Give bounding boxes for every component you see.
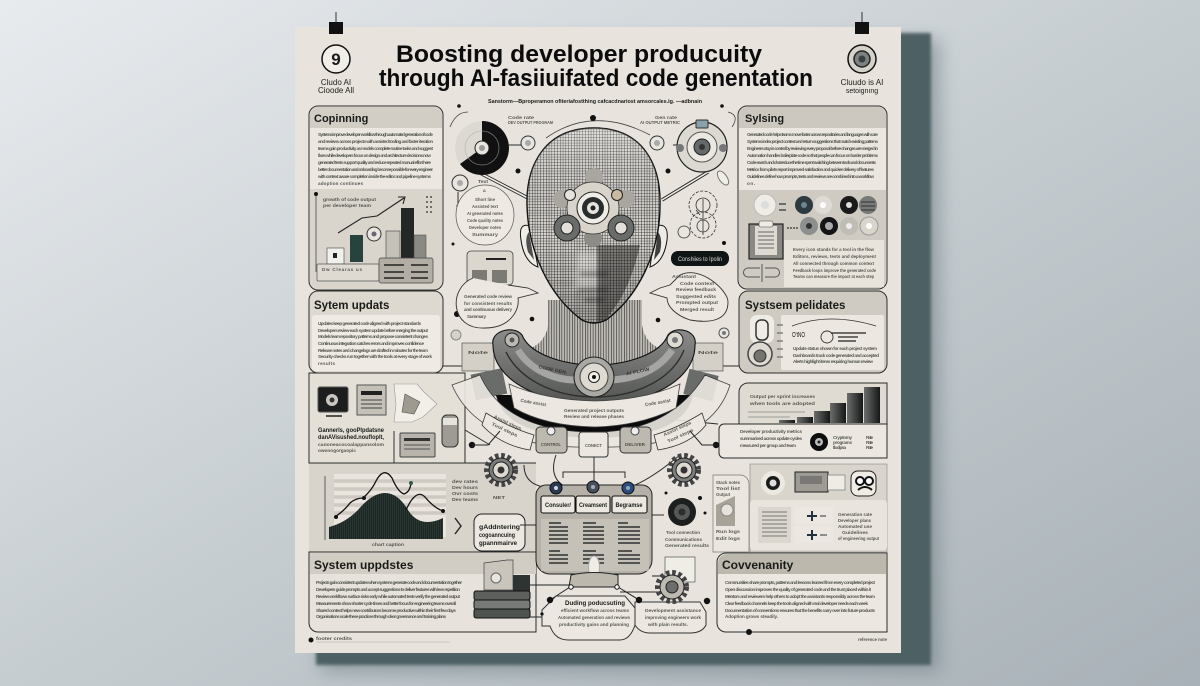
callout: bottom bubble two [635, 602, 706, 633]
side tabs right: Note [698, 350, 719, 355]
panel: metrics strip: measured per group and team [740, 443, 796, 448]
tab: Connect: CONECT [585, 443, 602, 448]
icon: small screen card [400, 433, 435, 457]
icon: window card [467, 251, 513, 285]
text block: Measurements show shorter cycle times and better focus for engineering teams overall [316, 601, 456, 606]
text block [784, 240, 884, 287]
icon: link [744, 264, 780, 282]
panel: Sylsing [738, 106, 887, 289]
text block [838, 512, 879, 541]
collar: AI FLOW [625, 366, 651, 376]
column headers: Begramse [616, 503, 643, 509]
text block: Every icon stands for a tool in the flow [793, 247, 874, 252]
text block [725, 580, 875, 619]
icon: camera node [676, 120, 727, 172]
callout: right speech bubble: Prompted output [676, 300, 719, 305]
panel: bar chart [739, 383, 887, 431]
collar [493, 330, 695, 404]
callout: left bubble: Assisted text [472, 204, 498, 209]
icon: disc [810, 433, 828, 451]
subtitle: Sanstorm—Bproperamon ofiteriafostthing cafcacdnariost amsorcales.ig. —adbnain [488, 99, 702, 105]
callout: right speech bubble: Review feedback [676, 287, 716, 292]
text block: Clear feedback channels keep the tools aligned with real developer needs each week [725, 601, 868, 606]
panel: metrics strip: Rate [866, 445, 873, 450]
black nodes left and right of ribbons [469, 431, 719, 448]
callout: cogoanncuing [479, 533, 515, 539]
text block: Alerts highlight items requiring human review [793, 359, 873, 364]
text block: Updates keep generated code aligned with project standards [318, 321, 421, 326]
beige banner: Generated project outputs [564, 408, 624, 413]
callout: gauge label: O'tNO [792, 332, 805, 339]
callout: left bubble: Text [478, 179, 489, 184]
side ribbon left: Tool steps [491, 421, 519, 438]
text block: Systems index project context and return suggestions that match existing patterns [747, 139, 878, 144]
side ribbon right [654, 413, 706, 450]
text block: Guidelines [842, 530, 868, 535]
icon: monitor [318, 387, 348, 416]
text block: teams gain productivity as models complete routine tasks and suggest [318, 146, 433, 151]
text block: of engineering output [838, 536, 879, 541]
text block: Update status shown for each project system [793, 346, 877, 351]
chart: mountain and line: chart caption [372, 542, 404, 547]
text block: Gannerls, gooPlpdatsne [318, 427, 384, 434]
icon: small node left [521, 136, 535, 150]
heading: Sytem updats [314, 300, 389, 312]
callout [474, 514, 525, 551]
text block [747, 132, 878, 186]
panel: System uppdstes [309, 552, 536, 632]
text block: Continuous integration catches errors and improves confidence [318, 341, 424, 346]
callout: bottom bubble one: efficient workflow across teams [561, 608, 629, 613]
icon: lower gear [658, 573, 686, 601]
text block: Security checks run together with the tools at every stage of work [318, 354, 432, 359]
text block: Editors, reviews, tests and deployment [793, 254, 876, 259]
beige banner: Review and release phases [564, 414, 624, 419]
callout: right speech bubble [650, 273, 728, 321]
icon: left node circle [452, 175, 468, 210]
icon: left hanging clip [329, 12, 343, 34]
ears [520, 225, 667, 267]
title: through AI-fasiiuifated code genentation [379, 65, 813, 92]
beige banner: Code assist [645, 398, 671, 407]
text block: top right labels: AI OUTPUT METRIC [640, 120, 681, 125]
text block: Dev hours [452, 485, 479, 490]
column headers: Consuler/ [545, 503, 571, 509]
panel: lower right mid column: Stack notes [716, 480, 740, 485]
column lines [549, 523, 640, 563]
icon: cylinder [442, 415, 458, 447]
callout: right speech bubble: Merged result [680, 307, 715, 312]
chart: donut dial [455, 121, 509, 175]
callout: bottom bubble two: improving engineers work [645, 615, 701, 620]
callout: left bubble: Summary [472, 232, 499, 237]
footer right: reference note [858, 637, 887, 642]
icon: person marker [569, 556, 618, 587]
icon: left gear [487, 456, 515, 484]
text block: Developers guide prompts and accept suggestions to deliver features with less repetition [316, 587, 460, 592]
text block: top right labels [640, 115, 681, 125]
text block: Projects gain consistent updates when systems generate code and documentation together [316, 580, 462, 585]
heading: Systsem pelidates [745, 300, 845, 312]
poster sheet [295, 27, 901, 653]
beige banner [509, 384, 680, 427]
side ribbon left: Assist steps [493, 414, 523, 431]
panel: tools and icons [309, 373, 465, 463]
icon row [754, 194, 878, 235]
text block: Adoption grows steadily. [725, 614, 778, 619]
footer left: footer credits [316, 636, 353, 641]
tab: Control: CONTROL [541, 442, 561, 447]
text block: top right labels: Gen rate [655, 115, 678, 120]
callout: gauge label [792, 319, 876, 343]
callout: right speech bubble: Code context [680, 281, 715, 286]
text block: NET [493, 495, 505, 500]
text block: results [318, 361, 335, 366]
text block: Systems improve developer workflow through automated generation of code [318, 132, 433, 137]
text block [748, 394, 815, 417]
text block: top left labels: Code rate [508, 115, 535, 120]
panel: lower right icons [750, 464, 887, 552]
callout: black pill: Conshiies to Ipolin [678, 256, 722, 263]
text block: Metrics from pilots report improved satisfaction and quicker delivery of features [747, 167, 874, 172]
side ribbon left [482, 413, 534, 450]
text block: Automation handles boilerplate code so that people can focus on harder problems [747, 153, 878, 158]
neck [525, 300, 665, 375]
text block: Shared context helps new contributors become productive within their first few days [316, 608, 456, 613]
footer left [308, 636, 450, 642]
tab: Control [536, 427, 567, 453]
side tabs right [683, 343, 723, 401]
text block: Review workflows surface risks early while automated tests verify the generated output [316, 594, 460, 599]
node dots [540, 585, 710, 616]
side ribbon right: Tool steps [667, 427, 695, 444]
callout: left bubble: Code quality notes [467, 218, 503, 223]
text block: with context aware completion inside the editor and pipeline systems [317, 174, 431, 179]
panel: metrics strip: summarised across update cycles [740, 436, 802, 441]
text block: when tools are adopted [749, 401, 815, 406]
text block: dev rates [452, 479, 479, 484]
beige banner: Code assist [520, 398, 547, 407]
dots right of head [451, 328, 729, 340]
callout: left bubble: Developer notes [469, 225, 501, 230]
callout: bottom bubble two: with plain results. [647, 622, 688, 627]
panel: lower right mid column: Edit logs [716, 536, 741, 541]
panel: lower right mid column: Tool list [716, 486, 741, 491]
text block: Output per sprint increases [750, 394, 815, 399]
logo: left badge: Cioode All [318, 86, 354, 95]
title: Boosting developer producuity [396, 41, 763, 68]
icon: right hanging clip [855, 12, 869, 34]
panel: metrics strip: tla dipsa [833, 445, 846, 450]
text block: Feedback loops improve the generated code [793, 268, 876, 273]
text block: danAVisushed.noufloplt, [318, 434, 384, 441]
icon: header connector dots [550, 481, 634, 494]
panel: lower right mid column: Output [716, 492, 730, 497]
panel: metrics strip: Rate [866, 435, 873, 440]
callout: left speech bubble: Generated code review [464, 294, 512, 299]
text block [452, 479, 505, 502]
panel: central table [536, 485, 652, 574]
icon: spiral emblem [678, 191, 717, 238]
text block [793, 346, 879, 364]
callout: left speech bubble: Summary [467, 314, 486, 319]
logo: left badge: Cludo AI [321, 78, 351, 87]
text block: knob caption [665, 530, 709, 548]
text block [316, 580, 462, 619]
text block: better documentation and onboarding become possible for every engineer [318, 167, 433, 172]
icon: right gear [670, 456, 698, 484]
text block: knob caption: Tool connection [666, 530, 700, 535]
collar disc [574, 357, 614, 397]
logo: right badge [841, 45, 883, 95]
panel: metrics strip [719, 424, 887, 458]
text block: Guidelines define how prompts, tests and reviews are combined into a workflow [747, 174, 874, 179]
callout: left bubble: a [483, 188, 486, 193]
callout: left bubble: AI generated notes [467, 211, 503, 216]
poster shadow [316, 33, 931, 665]
text block: knob caption: Communications [665, 537, 702, 542]
callout: bottom bubble one: Automated generation and reviews [558, 615, 630, 620]
text block: Communities share prompts, patterns and lessons learned from every completed project [725, 580, 875, 585]
text block: Organisations scale these practices through clear governance and training plans [316, 614, 446, 619]
logo: right badge: Cluudo is AI [841, 78, 883, 87]
callout: gAddntering [479, 524, 520, 531]
panel: metrics strip: Cryptomy [833, 435, 852, 440]
column headers [541, 496, 647, 513]
text block: Ovr costs [452, 491, 479, 496]
column headers: Creamsent [579, 503, 607, 509]
text block: Dev teams [452, 497, 479, 502]
text block [318, 321, 432, 366]
logo: left badge [318, 45, 354, 95]
text block: owonogorgaopic [318, 448, 356, 453]
callout: black pill [671, 251, 729, 266]
chart: mountain and line [325, 473, 446, 547]
text block [318, 427, 384, 453]
title [379, 41, 813, 92]
icon: server stack [474, 560, 530, 618]
text block: Developers review each system update before merging the output [318, 328, 428, 333]
text block: Automated use [838, 524, 872, 529]
heading: Covvenanity [722, 558, 794, 572]
tab: Deliver: DELIVER [625, 442, 646, 447]
arcs and dots around head [450, 104, 735, 322]
text block: Open discussion improves the quality of generated code and the trust placed within it [725, 587, 871, 592]
text block: generated tests support quality and reduce repeated manual effort here [318, 160, 431, 165]
panel: metrics strip: Rate [866, 440, 873, 445]
tab: Connect [579, 432, 608, 457]
outer beige arc [452, 375, 730, 447]
text block: Dashboards track code generated and accepted [793, 353, 879, 358]
callout: right speech bubble: Assistant [672, 274, 697, 279]
panel: Systsem pelidates [739, 291, 887, 373]
text block [317, 132, 433, 186]
text block: Generation rate [838, 512, 872, 517]
text block: adoption continues [318, 181, 363, 186]
arrow [455, 518, 461, 534]
text block: Mentors and reviewers help others to adopt the assistants responsibly across the team [725, 594, 875, 599]
icon: ring [761, 471, 785, 495]
text block: Engineers stay in control by reviewing every proposal before changes are merged in [747, 146, 878, 151]
icon: torn paper emblem [394, 384, 437, 422]
connectors bottom [530, 576, 665, 600]
heading: Sylsing [745, 113, 784, 125]
callout: bottom bubble one [542, 596, 635, 640]
collar black under-arc [496, 395, 693, 438]
face shading [574, 245, 640, 323]
collar: CODE GEN [538, 364, 567, 375]
callout: bottom bubble one: Duding poducsuting [565, 600, 625, 607]
icon: knob [664, 492, 706, 526]
line chart with bars: growth of code output [323, 197, 377, 202]
icon: paper [758, 507, 791, 543]
line chart with bars: Dw Clearas us [322, 267, 362, 272]
poster outer shadow glow [320, 40, 940, 672]
text block: and reviews across projects with assisted tooling and faster iteration [318, 139, 433, 144]
text block: Developer plans [838, 518, 871, 523]
side tabs left [462, 343, 507, 400]
text block: Teams can measure the impact at each step [793, 274, 874, 279]
callout: gpannmairve [479, 541, 518, 547]
icon: document [357, 385, 386, 415]
icon: device [795, 472, 845, 492]
panel: lower right mid column: Run logs [716, 529, 741, 534]
text block: Release notes and changelogs are drafted in minutes for the team [318, 348, 428, 353]
heading: Copinning [314, 113, 368, 125]
text block: Models learn repository patterns and propose consistent changes [318, 334, 428, 339]
text block: Generated code helps teams move faster across repositories and languages with care [747, 132, 878, 137]
text block: top left labels [508, 115, 553, 125]
heading: System uppdstes [314, 558, 414, 572]
icon: knot [851, 471, 876, 496]
lower small box [665, 557, 695, 582]
icon: small node right [650, 136, 664, 150]
panel: Covvenanity [717, 553, 887, 635]
panel: lower right mid column [713, 475, 749, 552]
text block: knob caption: Generated results [665, 543, 709, 548]
text block: canoneacocoalappansolom [318, 442, 384, 447]
icon: oval tag [715, 169, 731, 187]
line chart with bars: per developer team [323, 203, 371, 208]
panel: line chart area [309, 463, 536, 552]
panel: Copinning [309, 106, 443, 290]
callout: left bubble [456, 179, 514, 245]
text block: Documentation of conventions ensures that the benefits carry over into future products [725, 608, 875, 613]
text block: fixes while developers focus on design and architecture decisions now [318, 153, 431, 158]
line chart with bars [314, 192, 433, 283]
panel: metrics strip: Developer productivity metrics [740, 429, 802, 434]
logo: right badge: setoignıng [846, 88, 878, 95]
connector lines [443, 145, 739, 617]
callout: left speech bubble [456, 278, 538, 328]
tab: Deliver [620, 427, 651, 453]
logo: left badge: 9 [331, 50, 341, 69]
callout: left bubble: Short line [475, 197, 495, 202]
text block: top left labels: DEV OUTPUT PROGRAM [508, 120, 553, 125]
callout: right speech bubble: Suggested edits [676, 294, 716, 299]
callout: bottom bubble one: productivity gains and planning [559, 622, 629, 627]
callout: left speech bubble: and continuous delivery [464, 307, 512, 312]
central gear [553, 168, 635, 247]
callout: bottom bubble two: Development assistance [645, 608, 701, 613]
side tabs left: Note [468, 350, 489, 355]
side ribbon right: Assist steps [663, 420, 692, 437]
callout: left speech bubble: for consistent results [464, 301, 512, 306]
text block: All connected through common context [793, 261, 874, 266]
icon: plus signs [795, 507, 833, 543]
panel: System updates [309, 291, 443, 373]
text block: on. [747, 181, 755, 186]
icon: lock gauge [748, 315, 783, 366]
head wireframe [527, 128, 660, 323]
icon: clipboard [749, 221, 783, 259]
panel: metrics strip: programs [833, 440, 852, 445]
text block: Code search and chat reduce the time spent switching between tools and documents [747, 160, 876, 165]
